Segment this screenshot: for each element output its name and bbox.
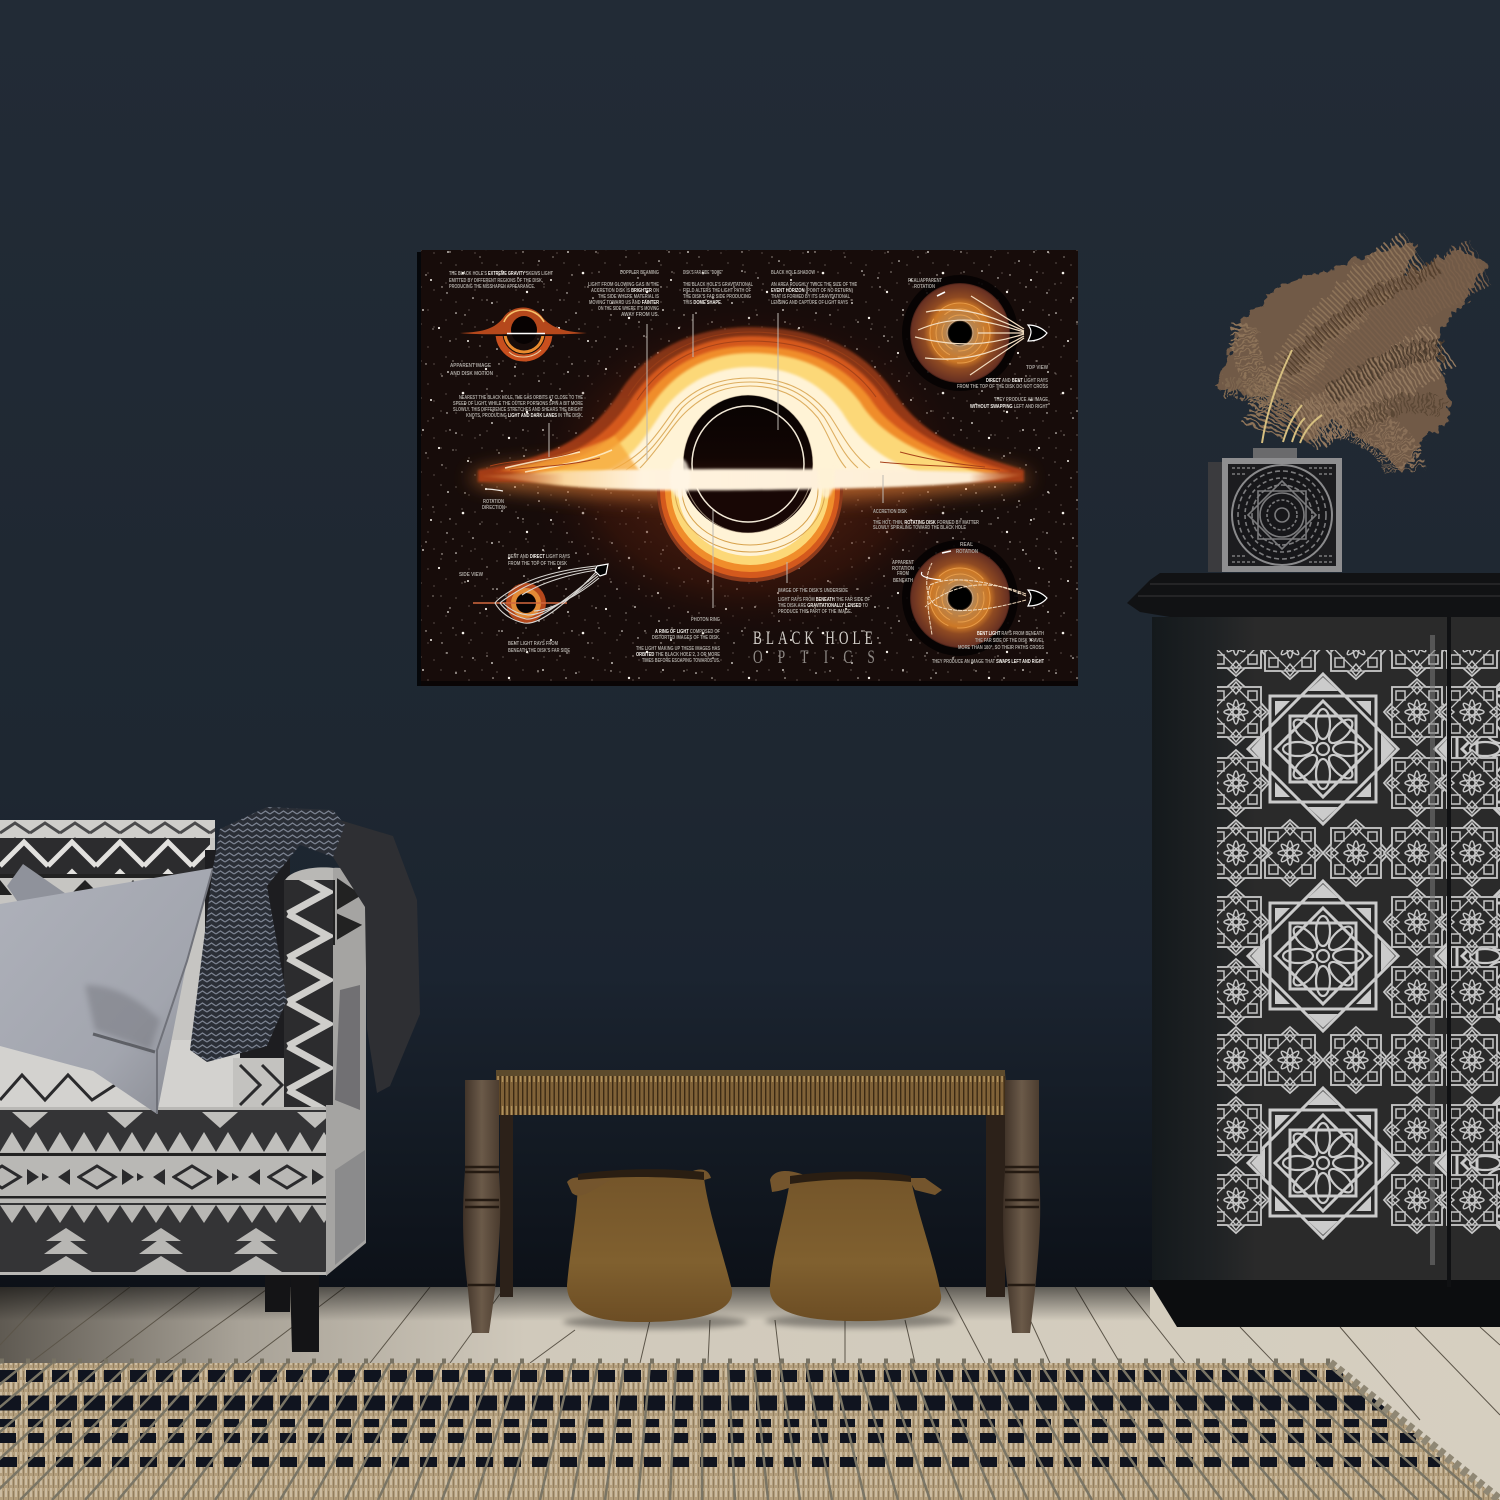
text: top view labels: FROM THE TOP OF THE DISK DO NOT CROSS bbox=[957, 384, 1048, 390]
text: photon ring: TIMES BEFORE ESCAPING TOWARDS US. bbox=[642, 658, 720, 664]
text: top view labels: DIRECT AND BENT LIGHT RAYS bbox=[986, 378, 1048, 384]
text: doppler beaming: AWAY FROM US. bbox=[621, 312, 659, 318]
text: extreme gravity: PRODUCING THE MISSHAPEN APPEARANCE. bbox=[449, 284, 535, 290]
text: photon ring bbox=[636, 617, 720, 664]
text: doppler beaming bbox=[588, 270, 660, 318]
black cabinet with geometric door pattern bbox=[1127, 573, 1500, 1327]
text: beneath view labels bbox=[892, 542, 1044, 665]
text: rotation direction: ROTATION bbox=[483, 499, 504, 505]
text: side view labels: SIDE VIEW bbox=[459, 572, 483, 578]
text: top view labels: WITHOUT SWAPPING LEFT AND RIGHT bbox=[970, 404, 1048, 410]
title: Black Hole Optics: OPTICS bbox=[753, 646, 875, 668]
text: apparent image label: AND DISK MOTION bbox=[450, 371, 493, 377]
woven jute rug bbox=[0, 1361, 1500, 1500]
text: doppler beaming: MOVING TOWARD US AND FAINTER bbox=[589, 300, 660, 306]
beneath view disk diagram bbox=[902, 540, 1047, 656]
text: beneath view labels: FROM bbox=[897, 571, 909, 577]
text: top view labels: TOP VIEW bbox=[1026, 365, 1048, 371]
text: doppler beaming: THE SIDE WHERE MATERIAL IS bbox=[598, 294, 659, 300]
text: black hole shadow: AN AREA ROUGHLY TWICE THE SIZE OF THE bbox=[771, 282, 857, 288]
title: Black Hole Optics: BLACK HOLE bbox=[753, 627, 873, 649]
text: doppler beaming: LIGHT FROM GLOWING GAS IN THE bbox=[588, 282, 659, 288]
text: photon ring: THE LIGHT MAKING UP THESE IMAGES HAS bbox=[636, 646, 720, 652]
text: photon ring: ORBITED THE BLACK HOLE 2, 3 OR MORE bbox=[636, 652, 720, 658]
text: image of the disk's underside: THE DISK ARE GRAVITATIONALLY LENSED TO bbox=[778, 603, 868, 609]
text: disk's far side dome: THE BLACK HOLE'S GRAVITATIONAL bbox=[683, 282, 753, 288]
text: nearest the black hole: KNOTS, PRODUCING LIGHT AND DARK LANES IN THE DISK. bbox=[466, 413, 583, 419]
text: image of the disk's underside: LIGHT RAYS FROM BENEATH THE FAR SIDE OF bbox=[778, 597, 870, 603]
text: disk's far side dome: DISK'S FAR SIDE "DOME" bbox=[683, 270, 723, 276]
text: nearest the black hole: SPEED OF LIGHT, WHILE THE OUTER PORTIONS SPIN A BIT MORE bbox=[453, 401, 583, 407]
rotation direction arrow bbox=[485, 489, 503, 491]
text: black hole shadow: LENSING AND CAPTURE OF LIGHT RAYS bbox=[771, 300, 848, 306]
text: disk's far side dome bbox=[683, 270, 753, 306]
text: extreme gravity: EMITTED BY DIFFERENT REGIONS OF THE DISK, bbox=[449, 278, 543, 284]
text: side view labels: BENT LIGHT RAYS FROM bbox=[508, 641, 558, 647]
text: image of the disk's underside: IMAGE OF THE DISK'S UNDERSIDE bbox=[778, 588, 848, 594]
text: beneath view labels: MORE THAN 180°, SO THEIR PATHS CROSS bbox=[958, 645, 1044, 651]
text: beneath view labels: BENT LIGHT RAYS FROM BENEATH bbox=[977, 631, 1044, 637]
small diagram: apparent image and disk motion bbox=[460, 308, 587, 358]
text: beneath view labels: ROTATION bbox=[892, 566, 914, 572]
text: disk's far side dome: THIS DOME SHAPE. bbox=[683, 300, 722, 306]
text: accretion disk: SLOWLY SPIRALING TOWARD THE BLACK HOLE bbox=[873, 525, 966, 531]
text: black hole shadow: THAT IS FORMED BY ITS GRAVITATIONAL bbox=[771, 294, 850, 300]
small diagram: side view bbox=[473, 564, 608, 623]
text: extreme gravity bbox=[449, 271, 553, 288]
text: photon ring: A RING OF LIGHT COMPOSED OF bbox=[655, 629, 720, 635]
text: black hole shadow: BLACK HOLE SHADOW bbox=[771, 270, 815, 276]
text: beneath view labels: THEY PRODUCE AN IMAGE THAT SWAPS LEFT AND RIGHT bbox=[932, 659, 1044, 665]
jute baskets bbox=[563, 1169, 955, 1329]
callout leader lines bbox=[549, 313, 883, 608]
text: nearest the black hole: SLOWLY. THIS DIFFERENCE STRETCHES AND SHEARS THE BRIGHT bbox=[453, 407, 583, 413]
title: Black Hole Optics bbox=[753, 632, 874, 663]
main black hole bbox=[470, 327, 1030, 582]
text: side view labels: BENT AND DIRECT LIGHT RAYS bbox=[508, 554, 570, 560]
text: black hole shadow: EVENT HORIZON (POINT OF NO RETURN) bbox=[771, 288, 853, 294]
text: top view labels: ROTATION bbox=[914, 284, 935, 290]
text: nearest the black hole: NEAREST THE BLACK HOLE, THE GAS ORBITS AT CLOSE TO THE bbox=[459, 395, 583, 401]
text: image of the disk's underside: PRODUCE THIS PART OF THE IMAGE. bbox=[778, 609, 852, 615]
text: extreme gravity: THE BLACK HOLE'S EXTREME GRAVITY SKEWS LIGHT bbox=[449, 271, 553, 277]
text: photon ring: DISTORTED IMAGES OF THE DISK. bbox=[652, 635, 720, 641]
text: accretion disk: THE HOT, THIN, ROTATING DISK FORMED BY MATTER bbox=[873, 520, 980, 526]
text: top view labels bbox=[908, 278, 1048, 410]
text: beneath view labels: REAL bbox=[960, 542, 973, 548]
text: side view labels bbox=[459, 554, 570, 654]
patterned armchair sofa bbox=[0, 807, 420, 1352]
text: black hole shadow bbox=[771, 270, 857, 306]
text: rotation direction bbox=[482, 499, 505, 509]
vase with pampas grass bbox=[1208, 243, 1487, 572]
text: beneath view labels: ROTATION bbox=[956, 549, 978, 555]
text: disk's far side dome: THE DISK'S FAR SIDE PRODUCING bbox=[683, 294, 751, 300]
text: nearest the black hole bbox=[453, 395, 583, 419]
text: beneath view labels: APPARENT bbox=[892, 560, 914, 566]
text: rotation direction: DIRECTION bbox=[482, 505, 505, 511]
text: apparent image label bbox=[450, 363, 493, 375]
text: side view labels: BENEATH THE DISK'S FAR SIDE bbox=[508, 648, 570, 654]
text: accretion disk bbox=[873, 509, 980, 531]
text: apparent image label: APPARENT IMAGE bbox=[450, 363, 491, 369]
text: photon ring: PHOTON RING bbox=[691, 617, 720, 623]
wooden floor bbox=[0, 1287, 1500, 1500]
text: top view labels: REAL/APPARENT bbox=[908, 278, 942, 284]
text: beneath view labels: THE FAR SIDE OF THE DISK TRAVEL bbox=[975, 638, 1044, 644]
text: beneath view labels: BENEATH bbox=[893, 578, 913, 584]
text: disk's far side dome: FIELD ALTERS THE LIGHT PATH OF bbox=[683, 288, 751, 294]
text: accretion disk: ACCRETION DISK bbox=[873, 509, 908, 515]
canvas poster: Black Hole Optics bbox=[417, 250, 1078, 686]
text: side view labels: FROM THE TOP OF THE DISK bbox=[508, 561, 568, 567]
text: doppler beaming: ON THE SIDE WHERE IT'S MOVING bbox=[598, 306, 659, 312]
wooden bench with woven seat bbox=[463, 1070, 1040, 1333]
text: top view labels: THEY PRODUCE AN IMAGE bbox=[994, 397, 1048, 403]
text: doppler beaming: DOPPLER BEAMING bbox=[620, 270, 659, 276]
text: image of the disk's underside bbox=[778, 588, 870, 615]
top view disk diagram bbox=[902, 275, 1047, 391]
text: doppler beaming: ACCRETION DISK IS BRIGHTER ON bbox=[591, 288, 659, 294]
